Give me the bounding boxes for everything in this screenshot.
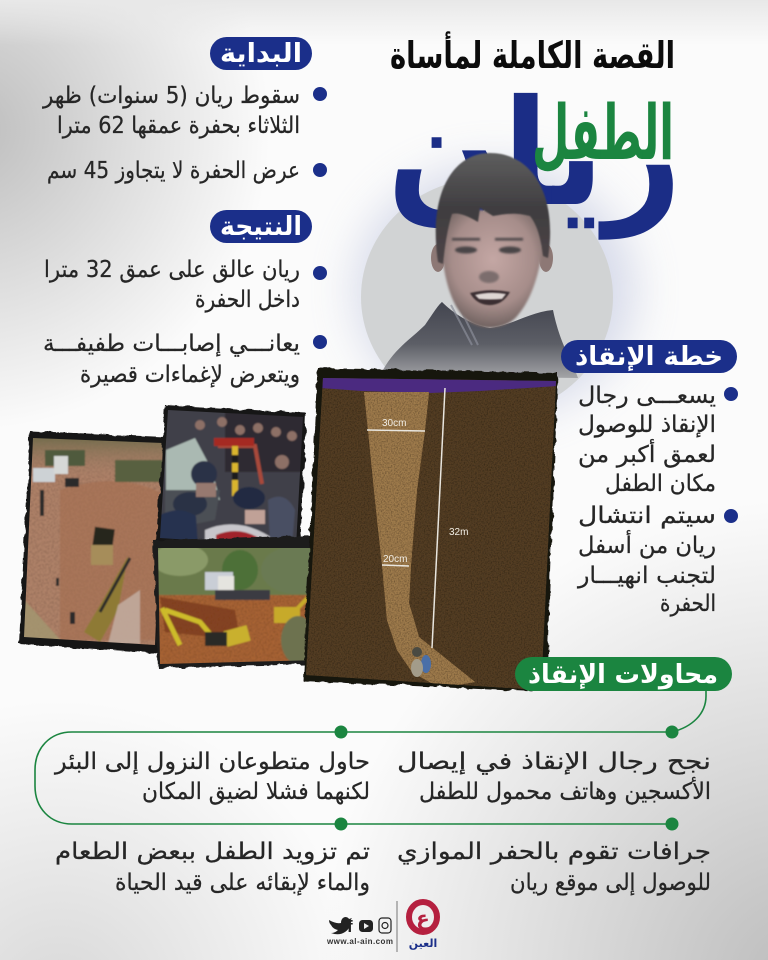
text: bulldozers digging: [397, 839, 711, 896]
text block: the result: ويتعرض لإغماءات قصيرة: [80, 362, 300, 388]
width line 20cm: [382, 565, 409, 566]
text block: the beginning: سقوط ريان (5 سنوات) ظهر: [42, 83, 300, 109]
bullet: [724, 387, 738, 401]
icon: youtube: [359, 920, 373, 932]
text block: the beginning: عرض الحفرة لا يتجاوز 45 سم: [47, 158, 300, 184]
website: www.al-ain.com: [326, 937, 393, 946]
hoodie zip: [451, 304, 478, 345]
icon: twitter: [329, 917, 352, 934]
text block: the result: داخل الحفرة: [195, 287, 300, 313]
face: [440, 210, 546, 328]
bullet: [724, 509, 738, 523]
label 20cm: 20cm: [383, 554, 407, 565]
text block: rescue plan: الإنقاذ للوصول: [578, 412, 716, 438]
node: [334, 726, 348, 738]
text block: rescue plan: سيتم انتشال: [578, 503, 716, 529]
photo: aerial view of rescue pit: [19, 430, 170, 653]
text block: the result: يعانـــي إصابـــات طفيفـــة: [43, 331, 300, 357]
social icons: [326, 917, 393, 946]
shaft: [364, 392, 475, 688]
text: bulldozers digging: للوصول إلى موقع ريان: [510, 870, 711, 896]
heading: rescue attempts: محاولات الإنقاذ: [528, 660, 718, 690]
child at bottom: [411, 647, 431, 677]
logo: Al-Ain: العين: [409, 937, 437, 950]
text: volunteers attempt: لكنهما فشلا لضيق المكان: [142, 779, 370, 805]
logo: Al-Ain: ع: [416, 906, 431, 930]
text: volunteers attempt: [54, 749, 370, 805]
hair: [436, 153, 550, 264]
heading: the beginning: البداية: [220, 39, 302, 69]
surface layer: [322, 378, 556, 393]
photo: excavators digging: [152, 535, 310, 669]
bullet: [313, 335, 327, 349]
text block: rescue plan: لعمق أكبر من: [578, 439, 716, 468]
eyes: [452, 238, 523, 254]
bullet: [313, 266, 327, 280]
portrait circle: [361, 178, 613, 416]
node: [334, 818, 348, 830]
portrait: boy: [380, 153, 578, 378]
text: oxygen and phone: الأكسجين وهاتف محمول للطفل: [419, 777, 711, 805]
mouth: [470, 290, 510, 305]
icon: facebook: f: [347, 917, 353, 936]
ears: [431, 244, 445, 272]
text: oxygen and phone: نجح رجال الإنقاذ في إيصال: [397, 749, 711, 775]
label 30cm: 30cm: [382, 418, 406, 429]
text block: rescue plan: يسعـــى رجال: [578, 383, 716, 409]
text block: the beginning: [42, 83, 327, 184]
text: food and water: تم تزويد الطفل ببعض الطعام: [55, 839, 370, 865]
text: food and water: والماء لإبقائه على قيد الحياة: [115, 870, 370, 896]
node: [666, 818, 678, 830]
text: food and water: [55, 839, 370, 896]
divider: [396, 901, 398, 952]
text block: rescue plan: الحفرة: [660, 591, 716, 617]
text block: rescue plan: لتجنب انهيـــار: [577, 563, 716, 589]
label 32m: 32m: [449, 527, 468, 538]
depth line: [432, 388, 445, 648]
diagram: well cross-section: [300, 368, 560, 695]
text: bulldozers digging: جرافات تقوم بالحفر الموازي: [397, 839, 711, 865]
hoodie: [380, 302, 578, 378]
portrait glow: [355, 165, 635, 415]
width line 30cm: [367, 430, 425, 431]
heading: the result: النتيجة: [220, 212, 302, 242]
text: oxygen and phone: [397, 749, 711, 805]
text: volunteers attempt: حاول متطوعان النزول إلى البئر: [54, 749, 370, 775]
logo: Al-Ain: [409, 902, 437, 950]
title: story of the tragedy: القصة الكاملة لمأساة: [390, 31, 675, 77]
nose: [479, 271, 499, 283]
timeline connector: [35, 690, 706, 830]
text block: rescue plan: مكان الطفل: [605, 471, 716, 497]
text block: the result: ريان عالق على عمق 32 مترا: [44, 257, 300, 283]
text block: rescue plan: [577, 383, 738, 617]
bullet: [313, 163, 327, 177]
photo: rescuers crowd around tripod: [156, 404, 307, 541]
node: [666, 726, 678, 738]
heading: rescue plan: خطة الإنقاذ: [575, 342, 723, 372]
text block: the result: [43, 257, 327, 388]
text block: the beginning: الثلاثاء بحفرة عمقها 62 مترا: [57, 113, 300, 139]
bullet: [313, 87, 327, 101]
text block: rescue plan: ريان من أسفل: [578, 530, 716, 559]
icon: instagram: [379, 918, 391, 933]
